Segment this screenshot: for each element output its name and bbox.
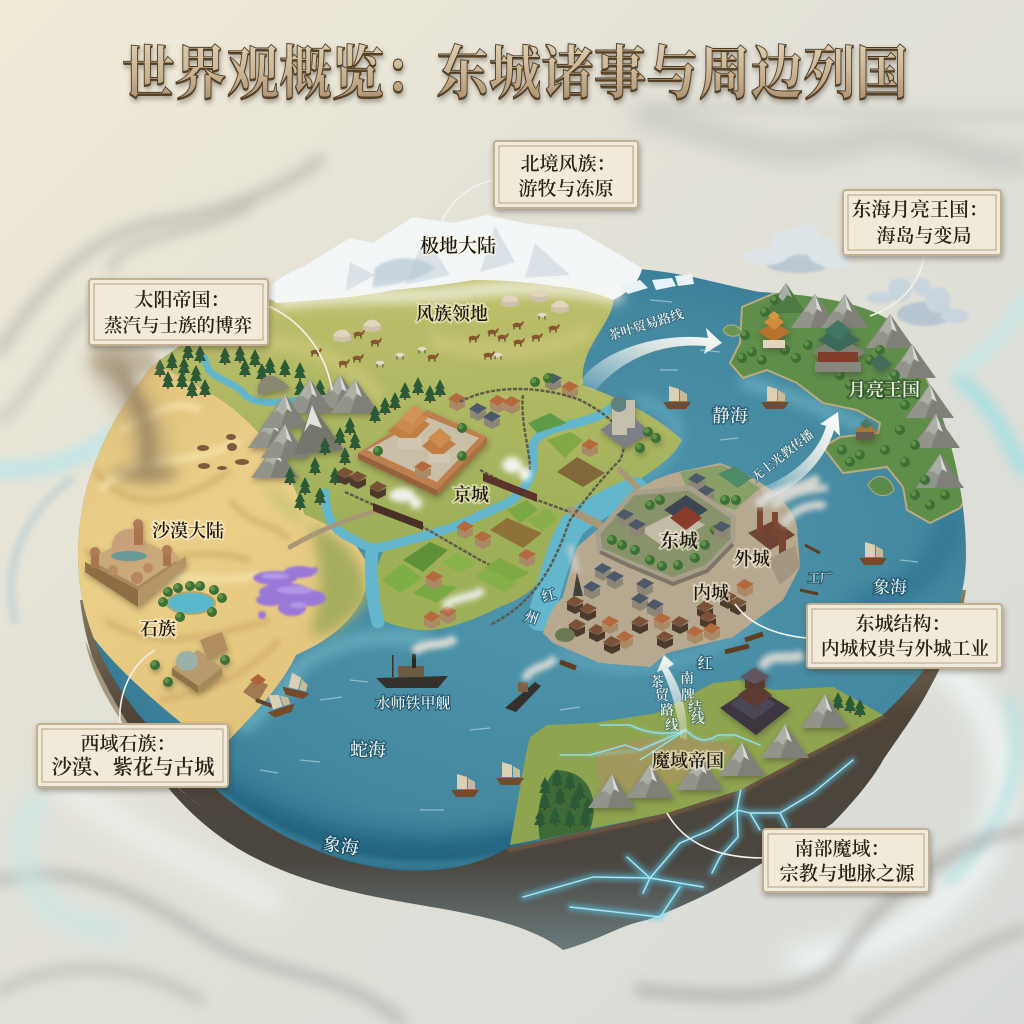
callout: northern wind clan [494,141,638,208]
callout: northern wind clan: 游牧与冻原 [518,178,614,200]
callout: western stone clan: 沙漠、紫花与古城 [51,755,215,779]
callout: western stone clan [37,724,228,787]
western harbour and boats [243,671,313,719]
moon kingdom palaces [758,311,892,440]
demon empire fortress [720,667,790,735]
map labels: 象海 [873,578,907,597]
polar continent snow mountains [262,215,642,303]
route label: south pass route vertical: 南牌结线 [680,670,705,727]
horse herds [310,313,560,368]
map labels: 象海 [322,834,360,858]
map labels: 静海 [712,406,748,426]
map labels: 内城 [693,583,729,603]
east city walls and inner palace [598,488,733,584]
southern harbour works with steam [423,590,483,629]
stone bridges [290,470,640,547]
map labels: 风族领地 [416,303,488,324]
southern peninsula and demon empire land [510,680,883,845]
callout: east sea moon kingdom: 东海月亮王国： [852,198,988,221]
second steamship [505,658,555,712]
small islets [723,325,894,495]
demon empire mountains [588,694,849,808]
map labels: 京城 [453,485,489,505]
mountain range between desert and capital [248,374,379,478]
sea surface [78,267,966,870]
desert camp ruins [197,434,249,470]
map labels: 红 [697,655,713,672]
callout: southern demon realm [763,829,929,892]
arrow: tea trade southern route [657,655,687,740]
callout: sun empire [89,279,268,345]
sailing ships [451,386,887,797]
region: desert continent [60,360,368,752]
purple flower field [253,566,326,619]
map labels: 东城 [660,530,698,552]
rock cliff underside of the world disc [80,590,966,950]
farm fields [382,413,605,603]
map labels: 月亮王国 [848,380,920,400]
oasis lake [158,581,227,622]
map labels: 蛇海 [350,740,386,760]
imperial capital palace complex [358,405,487,496]
moon kingdom mountains and woods [737,283,964,510]
arrow: supreme light religion spread [748,412,840,500]
callout: southern demon realm: 南部魔域： [794,837,890,860]
railway line [345,389,624,625]
map labels: 极地大陆 [420,234,496,257]
callout: western stone clan: 西域石族： [80,733,176,755]
stone clan outpost [150,632,230,693]
title: 世界观概览：东城诸事与周边列国 [122,41,908,106]
callout: east city structure [807,604,1002,668]
forest of the demon realm [534,692,866,827]
lower city blocks and market [555,563,721,654]
callout: east sea moon kingdom: 海岛与变局 [876,225,972,247]
callout: east city structure: 内城权贵与外城工业 [821,639,989,660]
factory steam on west dock [570,545,577,572]
route label: tea trade route vertical: 茶贸路线 [650,674,679,734]
callout: southern demon realm: 宗教与地脉之源 [780,862,915,885]
ironclad warship [376,638,455,688]
callout: sun empire: 太阳帝国： [134,289,230,311]
desert palace [85,519,186,607]
factory district with chimneys [696,507,800,619]
ice floes [620,274,694,294]
demon fortress smoke [762,655,803,668]
map labels: 州 [522,608,541,628]
conifer forest below mountains [284,377,446,510]
map labels: 工厂 [808,571,832,585]
north quarter of the east city [680,465,760,510]
east city district ground [543,463,800,667]
capital suburbs and storehouses [336,373,579,499]
arrow: tea trade route: 茶叶贸易路线 [606,306,685,343]
callout: east city structure: 东城结构： [855,613,951,635]
clouds over the moon kingdom [743,224,969,326]
leader lines [120,180,924,858]
callout: northern wind clan: 北境风族： [520,153,616,175]
callout: sun empire: 蒸汽与士族的博弈 [104,316,252,337]
arrow: supreme light religion spread: 无上光教传播 [748,426,817,484]
map labels: 外城 [734,549,770,569]
map labels: 红 [540,587,558,606]
glowing lightning veins in the cliff [523,760,853,917]
forests in the north-west [154,342,326,399]
sea shading and ripples [200,300,950,866]
tornado [91,346,179,482]
region: northern wind clan grassland [150,274,682,548]
map labels: 水师铁甲舰 [375,695,451,712]
steam trains [373,473,537,530]
map labels: 魔域帝国 [652,751,724,771]
rivers [205,358,635,622]
factory smoke [760,480,825,522]
region: southern farmland peninsula [373,507,570,630]
blue ley line rivers [560,725,760,760]
yurts of the wind clan [333,290,569,342]
map labels [140,234,920,858]
train steam [389,457,531,509]
moon kingdom islands [730,288,975,523]
callout: east sea moon kingdom [843,190,1001,255]
central church island [600,396,661,453]
map labels: 石族 [140,619,176,639]
map labels: 沙漠大陆 [152,520,224,541]
arrow: tea trade route [580,306,722,392]
